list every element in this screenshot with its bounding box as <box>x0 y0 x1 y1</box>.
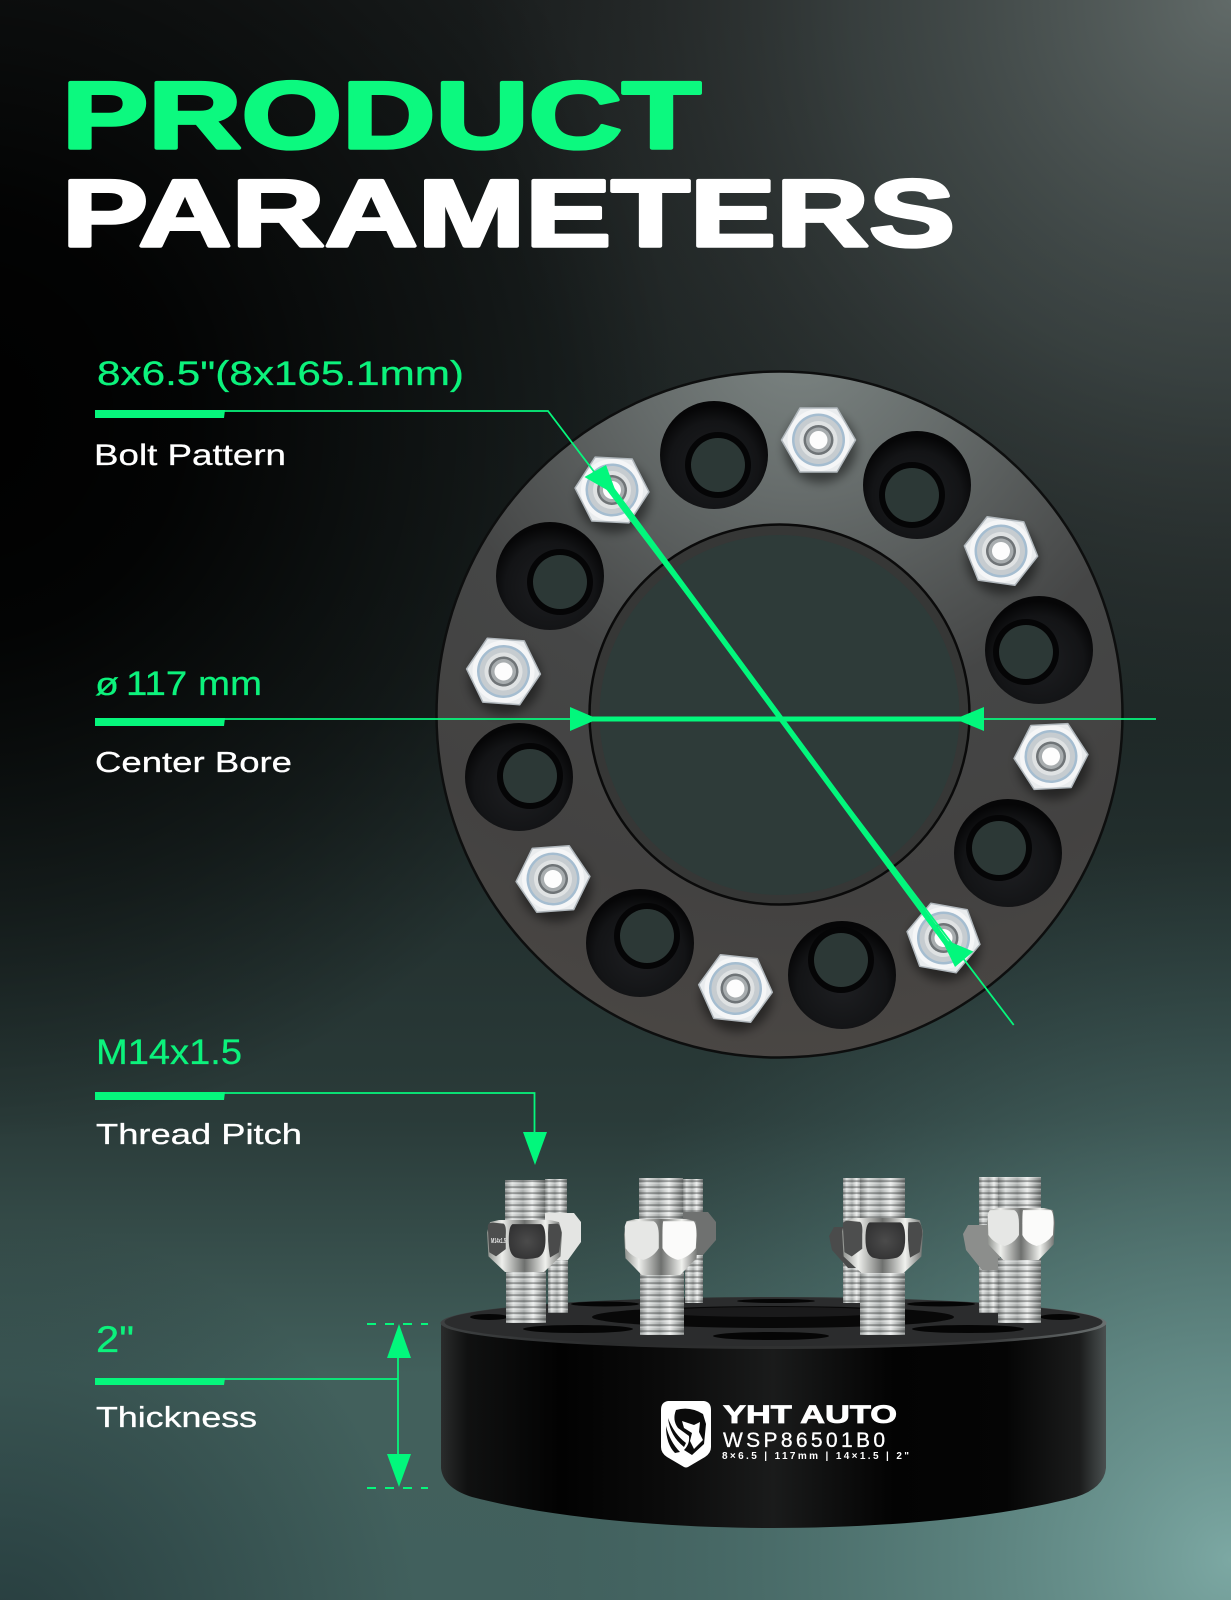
label: Bolt Pattern <box>94 439 286 472</box>
side view of wheel spacer <box>440 1177 1106 1528</box>
label bar <box>95 410 225 418</box>
title line: PARAMETERS: PARAMETERS <box>62 161 955 267</box>
nut stamp text: M14x1.5 <box>491 1238 506 1245</box>
spacer body <box>441 1324 1106 1528</box>
arrow head left <box>570 707 598 731</box>
top surface <box>440 1297 1106 1349</box>
label bar <box>95 1092 225 1100</box>
spec line: 8×6.5 | 117mm | 14×1.5 | 2" <box>722 1451 909 1462</box>
title line: PRODUCT: PRODUCT <box>62 63 701 169</box>
center bore dimension arrow <box>95 707 1156 731</box>
back lug studs <box>545 1177 1001 1313</box>
dimension arrow <box>95 1324 428 1488</box>
value: 8x6.5"(8x165.1mm) <box>97 355 464 393</box>
value: ø <box>95 666 119 702</box>
value: 117 mm <box>126 665 262 703</box>
label: Center Bore <box>95 747 292 779</box>
label bar <box>95 1378 225 1385</box>
label: Thread Pitch <box>96 1119 302 1151</box>
spec: bolt pattern <box>94 355 464 472</box>
arrow head right <box>955 707 984 731</box>
front view of wheel spacer <box>436 370 1124 1058</box>
spec: thickness <box>95 1319 428 1488</box>
label: Thickness <box>96 1402 257 1434</box>
value: 2" <box>96 1319 134 1360</box>
lug holes <box>465 401 1093 1029</box>
arrow head bottom <box>941 938 973 967</box>
center bore <box>590 524 970 904</box>
brand name: YHT AUTO <box>723 1401 897 1429</box>
brand logo on spacer <box>661 1401 909 1468</box>
model number: WSP86501B0 <box>723 1429 885 1452</box>
front lug studs <box>487 1177 1055 1335</box>
spec: center bore <box>95 665 292 779</box>
spacer disc <box>436 370 1124 1058</box>
leader arrow <box>95 1093 547 1165</box>
lug nuts <box>464 408 1091 1035</box>
icon: lion shield <box>661 1401 711 1468</box>
title <box>62 63 955 267</box>
value: M14x1.5 <box>96 1033 242 1072</box>
bolt pattern leader and diameter arrow <box>95 411 1014 1025</box>
arrow head top <box>584 465 617 496</box>
spec: thread pitch <box>95 1033 547 1165</box>
label bar <box>95 718 225 726</box>
